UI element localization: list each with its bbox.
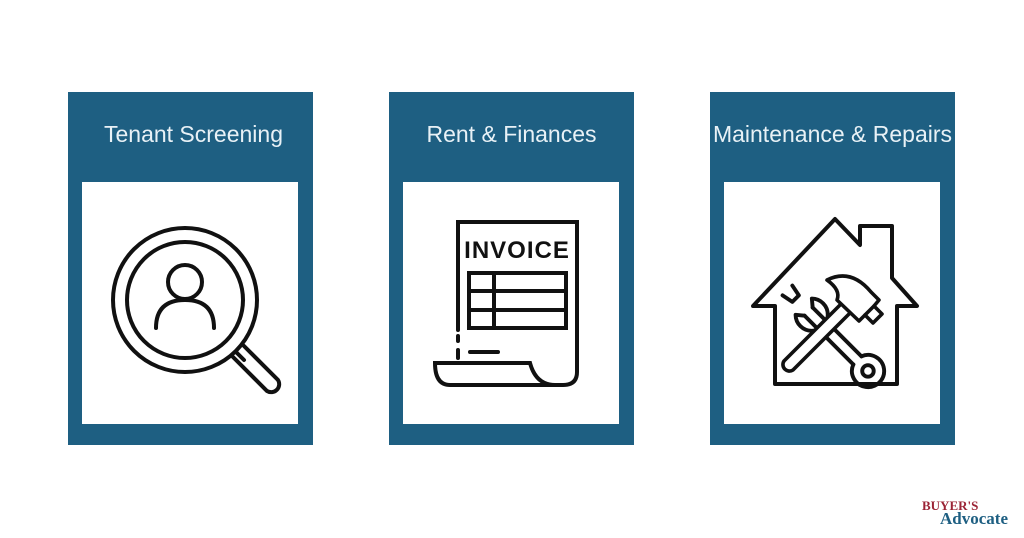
icon: invoice: INVOICE (464, 237, 570, 264)
icon: magnifier with person (82, 182, 298, 424)
panel: tenant screening (68, 92, 313, 445)
heading: tenant screening: Tenant Screening (104, 121, 283, 147)
icon: invoice (403, 182, 619, 424)
heading: rent & finances: Rent & Finances (426, 121, 597, 147)
heading: maintenance & repairs: Maintenance & Repairs (713, 121, 952, 147)
panel: maintenance & repairs (710, 92, 955, 445)
logo: buyers advocate: BUYER'S (922, 498, 978, 513)
logo: buyers advocate (922, 498, 1008, 528)
logo: buyers advocate: Advocate (940, 509, 1008, 528)
icon: house with tools (724, 182, 940, 424)
panel: rent & finances (389, 92, 634, 445)
